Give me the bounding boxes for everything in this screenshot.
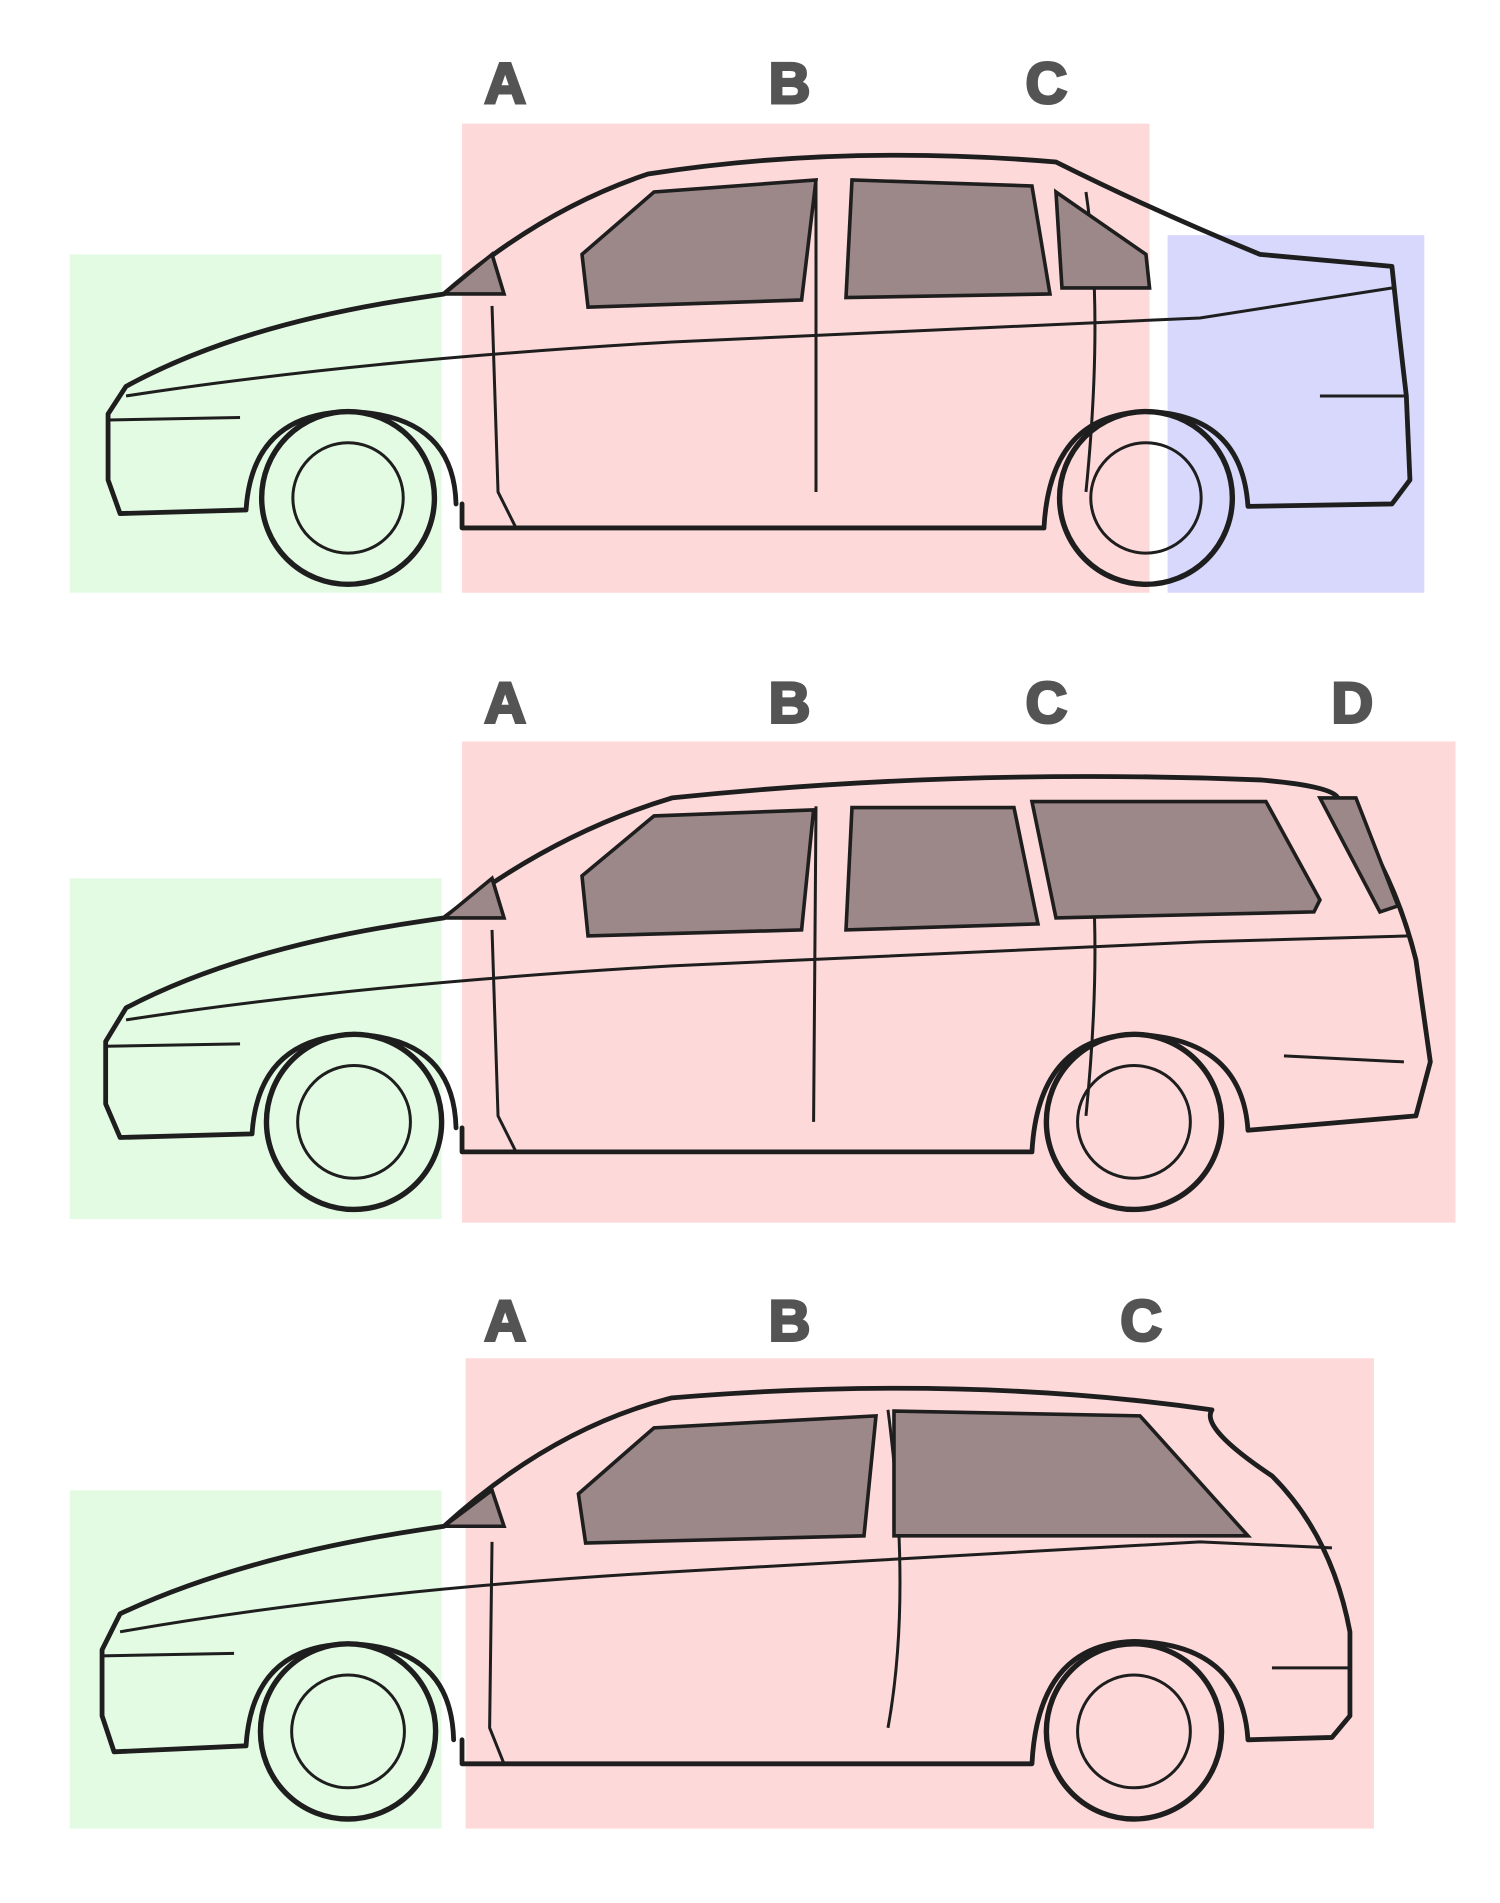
pillar labels <box>484 1289 1162 1353</box>
pillar labels: B <box>769 52 810 116</box>
pillar labels: B <box>769 671 810 735</box>
pillar labels: C <box>1026 671 1067 735</box>
pillar labels: A <box>484 671 526 735</box>
zone: front (green) <box>70 878 442 1219</box>
pillar labels: C <box>1026 52 1067 116</box>
pillar labels <box>484 671 1373 735</box>
pillar labels: B <box>769 1289 810 1353</box>
panel: hatchback <box>70 1289 1374 1829</box>
pillar labels: A <box>484 1289 526 1353</box>
car: wagon outline <box>106 776 1430 1209</box>
zone: cabin (pink) <box>466 1358 1374 1829</box>
zone: cabin (pink) <box>462 124 1150 593</box>
zone: front (green) <box>70 254 442 593</box>
pillar labels: C <box>1120 1289 1162 1353</box>
zone: cabin (pink) <box>462 742 1456 1223</box>
pillar labels: D <box>1332 671 1373 735</box>
panel: wagon <box>70 671 1456 1223</box>
car: sedan outline <box>108 155 1410 584</box>
car: hatchback outline <box>102 1388 1350 1819</box>
zone: trunk (blue) <box>1168 235 1424 593</box>
panel: sedan <box>70 52 1424 593</box>
pillar labels: A <box>484 52 526 116</box>
pillar labels <box>484 52 1067 116</box>
zone: front (green) <box>70 1490 442 1829</box>
